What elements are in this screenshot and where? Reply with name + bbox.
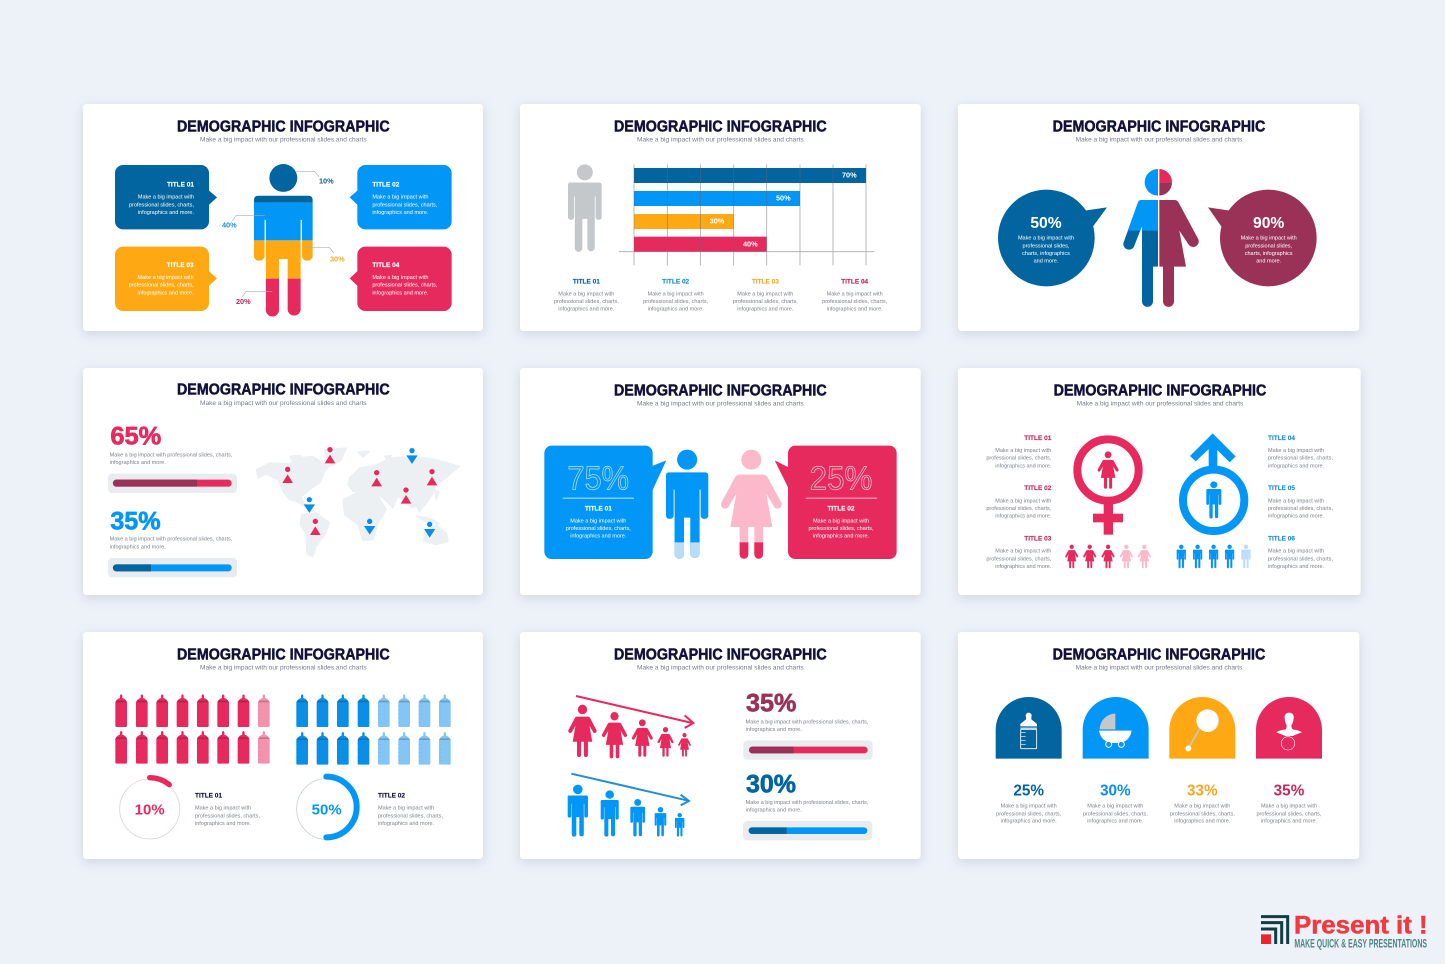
- stat: 35%: 35%: [746, 689, 796, 717]
- subheading: Make a big impact with our professional slides and charts: [200, 137, 367, 144]
- stat: 65%: [108, 423, 237, 493]
- text: 35%: professional slides, charts,: [1256, 811, 1322, 817]
- callout: title 04: professional slides, charts,: [372, 283, 438, 289]
- callout: title 02: TITLE 02: [372, 182, 400, 189]
- callout: 50%: 50%: [1030, 215, 1062, 232]
- heading: DEMOGRAPHIC INFOGRAPHIC: [614, 646, 827, 663]
- text: title 04: infographics and more.: [1268, 463, 1325, 469]
- label: 20%: 20%: [236, 297, 251, 306]
- icon: split person: [1123, 169, 1199, 307]
- text: title 05: Make a big impact with: [1268, 498, 1324, 504]
- callout: 90%: Make a big impact with: [1241, 236, 1297, 242]
- heading: DEMOGRAPHIC INFOGRAPHIC: [177, 382, 390, 399]
- callout: title 04: [350, 247, 452, 311]
- text: title 03: professional slides, charts,: [733, 299, 798, 305]
- callout: 25%: TITLE 02: [827, 506, 855, 513]
- text: title 02: infographics and more.: [648, 307, 704, 313]
- bar chart: 30%: [710, 217, 725, 226]
- logo wordmark: Present it !: [1294, 912, 1428, 939]
- text: 33%: infographics and more.: [1174, 819, 1231, 825]
- heading: DEMOGRAPHIC INFOGRAPHIC: [1053, 646, 1265, 663]
- subheading: Make a big impact with our professional slides and charts: [637, 137, 804, 144]
- stat: 35%: infographics and more.: [110, 544, 166, 550]
- stat: 30%: infographics and more.: [746, 808, 802, 814]
- callout: 75%: TITLE 01: [585, 506, 612, 513]
- callout: 90%: professional slides,: [1245, 243, 1293, 249]
- text: title 02: Make a big impact with: [995, 498, 1051, 504]
- callout: 90%: and more.: [1256, 258, 1282, 264]
- callout: title 03: professional slides, charts,: [129, 283, 194, 289]
- stat: 65%: Make a big impact with professional slides, charts,: [110, 452, 233, 458]
- label: 40%: 40%: [222, 221, 237, 230]
- text: title 01: [986, 435, 1052, 469]
- callout: 50%: [998, 190, 1107, 286]
- subheading: Make a big impact with our professional slides and charts: [1076, 137, 1243, 144]
- text: title 03: infographics and more.: [995, 564, 1052, 570]
- text: title 03: [733, 278, 798, 313]
- text: 33%: 33%: [1187, 782, 1218, 799]
- text: title 04: TITLE 04: [841, 278, 869, 285]
- icon: female symbol: [1077, 439, 1139, 535]
- subheading: Make a big impact with our professional slides and charts: [1076, 665, 1243, 672]
- callout: 90%: [1208, 190, 1317, 286]
- text: title 03: TITLE 03: [752, 278, 779, 285]
- text: title 02: professional slides, charts,: [378, 813, 443, 819]
- pictogram: blue bottles: [296, 694, 451, 765]
- text: title 02: professional slides, charts,: [986, 506, 1052, 512]
- panel: baby items: [958, 632, 1359, 859]
- stat: 35%: Make a big impact with professional slides, charts,: [110, 537, 233, 543]
- panel: gender symbols: [958, 368, 1361, 595]
- icon row: women: [568, 705, 691, 758]
- icon: segmented person: [254, 164, 313, 317]
- text: title 02: [378, 793, 443, 827]
- text: 33%: professional slides, charts,: [1170, 811, 1235, 817]
- text: title 01: infographics and more.: [195, 821, 252, 827]
- callout: title 04: infographics and more.: [372, 290, 429, 296]
- callout: title 03: [115, 247, 217, 311]
- text: title 01: [554, 278, 619, 313]
- label: 30%: 30%: [330, 254, 345, 263]
- heading: DEMOGRAPHIC INFOGRAPHIC: [177, 646, 390, 663]
- icon: man: [666, 450, 708, 559]
- icon row: men: [568, 785, 684, 837]
- callout: 50%: professional slides,: [1023, 243, 1070, 249]
- text: title 02: TITLE 02: [662, 278, 690, 285]
- gauge: 50%: [297, 777, 358, 840]
- icon: logo mark: [1261, 917, 1288, 944]
- text: title 03: [986, 535, 1052, 570]
- callout: 25%: [775, 446, 897, 559]
- icon: male symbol: [1183, 433, 1244, 531]
- text: title 06: [1268, 535, 1333, 570]
- callout: 75%: 75%: [567, 460, 629, 497]
- stat: 30%: [743, 770, 872, 840]
- text: title 02: professional slides, charts,: [643, 299, 709, 305]
- gauge: 10%: [120, 778, 180, 839]
- stat: 35%: Make a big impact with professional slides, charts,: [746, 719, 869, 725]
- label: 20%: [236, 291, 272, 306]
- heading: DEMOGRAPHIC INFOGRAPHIC: [177, 118, 390, 135]
- subheading: Make a big impact with our professional slides and charts: [200, 400, 367, 407]
- callout: 75%: Make a big impact with: [570, 518, 626, 524]
- gauge: 10%: 10%: [135, 801, 165, 818]
- label: 10%: 10%: [319, 177, 334, 186]
- callout: 50%: and more.: [1034, 258, 1059, 264]
- subheading: Make a big impact with our professional slides and charts: [637, 665, 804, 672]
- text: title 02: Make a big impact with: [378, 806, 434, 812]
- stat: 35%: infographics and more.: [746, 727, 802, 733]
- text: title 01: TITLE 01: [573, 278, 600, 285]
- label: 10%: [296, 172, 334, 186]
- text: title 04: Make a big impact with: [827, 291, 883, 297]
- callout: title 03: TITLE 03: [167, 262, 194, 269]
- arrow: red trend: [576, 696, 693, 728]
- heading: DEMOGRAPHIC INFOGRAPHIC: [1054, 382, 1266, 399]
- text: title 02: infographics and more.: [995, 514, 1052, 520]
- text: title 03: infographics and more.: [737, 307, 794, 313]
- callout: 75%: [544, 446, 666, 559]
- callout: title 01: [115, 165, 217, 229]
- text: title 03: Make a big impact with: [995, 549, 1051, 555]
- callout: 75%: professional slides, charts,: [566, 526, 631, 532]
- text: 30%: [1083, 782, 1148, 825]
- text: 25%: 25%: [1013, 782, 1044, 799]
- text: 30%: Make a big impact with: [1087, 804, 1143, 810]
- text: title 01: professional slides, charts,: [195, 813, 260, 819]
- callout: title 02: professional slides, charts,: [372, 202, 438, 208]
- text: title 06: TITLE 06: [1268, 535, 1295, 542]
- panel: world map: [83, 368, 483, 595]
- text: title 06: Make a big impact with: [1268, 549, 1324, 555]
- text: 35%: Make a big impact with: [1261, 804, 1317, 810]
- text: title 05: infographics and more.: [1268, 514, 1325, 520]
- bar chart: 70%: [842, 171, 857, 180]
- panel: body segments figure: [83, 104, 483, 331]
- callout: title 02: Make a big impact with: [372, 195, 428, 201]
- callout: title 04: Make a big impact with: [372, 275, 428, 281]
- text: title 01: Make a big impact with: [995, 448, 1051, 454]
- arrow: blue trend: [571, 774, 689, 805]
- stat: 35%: [108, 507, 237, 577]
- bar chart: 50%: [776, 194, 791, 203]
- panel: baby bottles: [83, 632, 483, 859]
- text: 25%: professional slides, charts,: [996, 811, 1062, 817]
- callout: title 01: Make a big impact with: [138, 195, 194, 201]
- text: title 02: TITLE 02: [1024, 485, 1052, 492]
- text: title 06: professional slides, charts,: [1268, 556, 1333, 562]
- callout: title 02: [350, 165, 452, 229]
- text: title 02: [643, 278, 709, 313]
- callout: title 03: Make a big impact with: [138, 275, 194, 281]
- text: title 04: professional slides, charts,: [1268, 456, 1333, 462]
- text: 35%: 35%: [1274, 782, 1305, 799]
- subheading: Make a big impact with our professional slides and charts: [1077, 401, 1244, 408]
- callout: title 04: TITLE 04: [372, 262, 400, 269]
- callout: 50%: charts, infographics: [1022, 251, 1070, 257]
- text: title 05: professional slides, charts,: [1268, 506, 1333, 512]
- icon: pacifier arch: [1256, 697, 1322, 759]
- text: title 01: TITLE 01: [1024, 435, 1052, 442]
- callout: title 01: professional slides, charts,: [129, 202, 194, 208]
- label: 40%: [222, 215, 265, 230]
- text: title 04: infographics and more.: [827, 307, 883, 313]
- callout: 50%: Make a big impact with: [1018, 236, 1074, 242]
- icon row: women: [1065, 545, 1151, 568]
- icon: bottle arch: [996, 697, 1062, 759]
- callout: 25%: professional slides, charts,: [808, 526, 874, 532]
- callout: title 01: TITLE 01: [167, 182, 194, 189]
- text: title 01: TITLE 01: [195, 793, 222, 800]
- text: 30%: infographics and more.: [1087, 819, 1144, 825]
- text: 25%: infographics and more.: [1001, 819, 1057, 825]
- heading: DEMOGRAPHIC INFOGRAPHIC: [614, 118, 827, 135]
- text: title 04: Make a big impact with: [1268, 448, 1324, 454]
- text: title 02: TITLE 02: [378, 793, 405, 800]
- text: title 01: professional slides, charts,: [554, 299, 619, 305]
- text: title 05: [1268, 485, 1333, 520]
- text: title 01: professional slides, charts,: [986, 456, 1052, 462]
- world map: [256, 448, 460, 556]
- stat: 30%: Make a big impact with professional slides, charts,: [746, 800, 869, 806]
- callout: title 02: infographics and more.: [372, 210, 429, 216]
- icon: stroller arch: [1083, 697, 1149, 759]
- text: 33%: Make a big impact with: [1174, 804, 1230, 810]
- text: title 01: Make a big impact with: [558, 291, 614, 297]
- callout: 25%: infographics and more.: [813, 534, 870, 540]
- gauge: 50%: 50%: [312, 801, 342, 818]
- callout: 75%: infographics and more.: [570, 534, 627, 540]
- text: title 06: infographics and more.: [1268, 564, 1325, 570]
- text: 35%: infographics and more.: [1261, 819, 1318, 825]
- bar chart: 40%: [743, 240, 758, 249]
- text: 30%: professional slides, charts,: [1083, 811, 1148, 817]
- text: title 01: [195, 793, 260, 827]
- map pins: [282, 447, 437, 538]
- heading: DEMOGRAPHIC INFOGRAPHIC: [1053, 118, 1265, 135]
- stat: 65%: 65%: [110, 423, 161, 451]
- text: title 04: [822, 278, 888, 313]
- text: title 01: infographics and more.: [995, 463, 1052, 469]
- callout: title 01: infographics and more.: [138, 210, 194, 216]
- text: title 04: [1268, 435, 1333, 469]
- text: title 05: TITLE 05: [1268, 485, 1295, 492]
- callout: 25%: 25%: [810, 460, 872, 497]
- text: title 03: TITLE 03: [1024, 535, 1052, 542]
- panel: gender comparison: [520, 368, 921, 595]
- callout: 25%: Make a big impact with: [813, 518, 869, 524]
- panel: split figure: [958, 104, 1359, 331]
- text: title 03: Make a big impact with: [737, 291, 793, 297]
- subheading: Make a big impact with our professional slides and charts: [200, 665, 367, 672]
- text: title 03: professional slides, charts,: [986, 556, 1052, 562]
- subheading: Make a big impact with our professional slides and charts: [637, 401, 804, 408]
- text: 25%: Make a big impact with: [1001, 804, 1057, 810]
- icon: rattle arch: [1169, 697, 1235, 759]
- stat: 35%: [743, 689, 873, 760]
- icon row: men: [1177, 545, 1251, 568]
- text: 35%: [1256, 782, 1322, 825]
- icon: gray person: [568, 164, 602, 252]
- text: 30%: 30%: [1100, 782, 1131, 799]
- text: title 02: Make a big impact with: [648, 291, 704, 297]
- bar chart: [619, 164, 874, 265]
- stat: 65%: infographics and more.: [110, 460, 166, 466]
- text: 33%: [1170, 782, 1235, 825]
- text: title 04: professional slides, charts,: [822, 299, 888, 305]
- label: 30%: [305, 248, 345, 263]
- icon: woman: [721, 450, 782, 559]
- stat: 30%: 30%: [746, 770, 796, 798]
- logo: Present it: [1261, 912, 1428, 951]
- callout: title 03: infographics and more.: [138, 290, 194, 296]
- text: 25%: [996, 782, 1062, 825]
- pictogram: red bottles: [115, 694, 270, 764]
- text: title 02: infographics and more.: [378, 821, 435, 827]
- panel: bar chart: [520, 104, 921, 331]
- text: title 01: Make a big impact with: [195, 806, 251, 812]
- callout: 90%: 90%: [1253, 215, 1284, 232]
- heading: DEMOGRAPHIC INFOGRAPHIC: [614, 382, 827, 399]
- stat: 35%: 35%: [110, 507, 161, 535]
- text: title 02: [986, 485, 1052, 520]
- callout: 90%: charts, infographics: [1245, 251, 1293, 257]
- text: title 04: TITLE 04: [1268, 435, 1295, 442]
- panel: declining population: [520, 632, 921, 859]
- text: title 01: infographics and more.: [558, 307, 615, 313]
